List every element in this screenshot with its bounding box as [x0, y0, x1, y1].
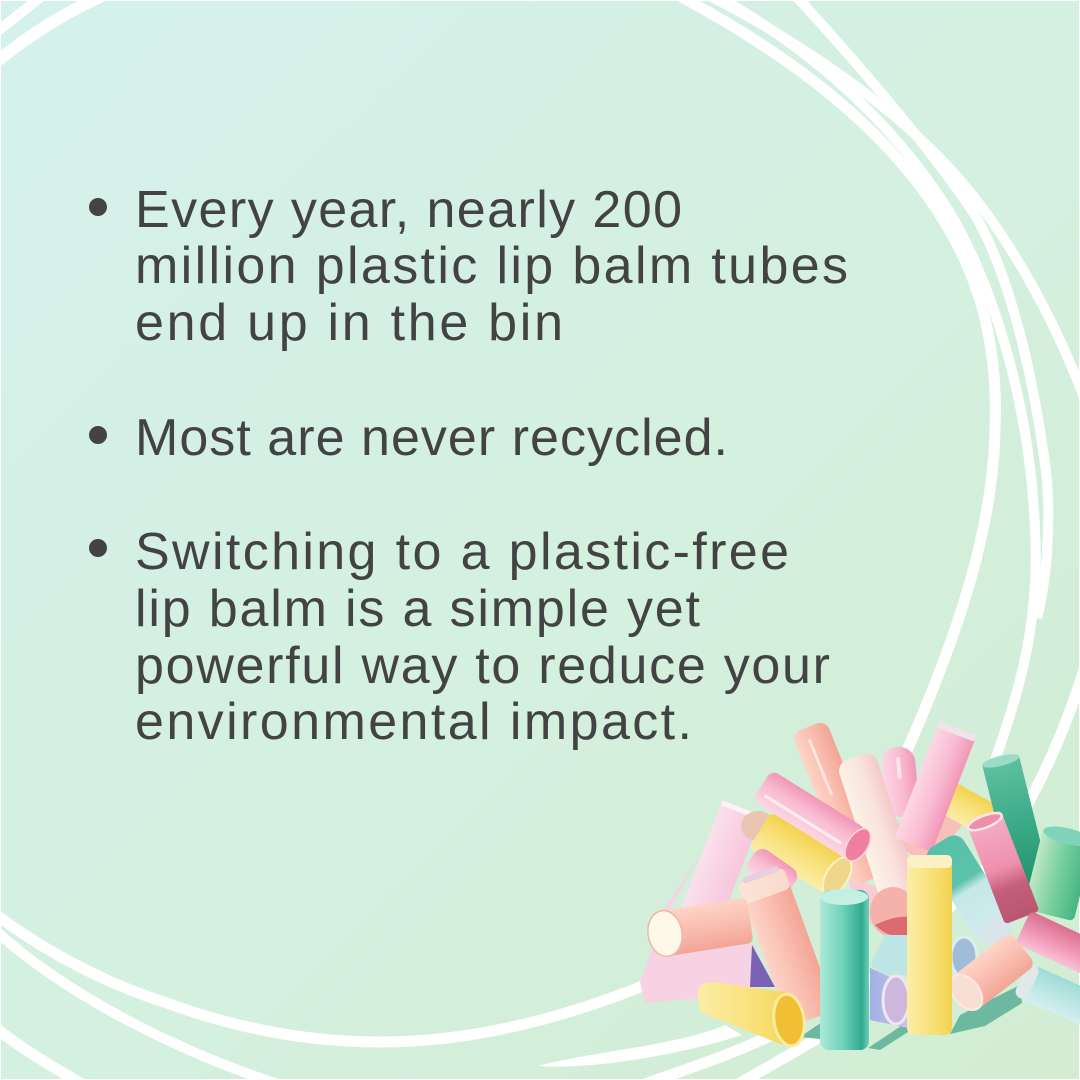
tube: peach right [943, 931, 1036, 1017]
bullet: switching to plastic-free: powerful way to reduce your [135, 637, 830, 695]
tube: bottom yellow [698, 982, 807, 1048]
tube: pale blue back [870, 935, 910, 975]
bullet: switching to plastic-free: environmental impact. [135, 693, 692, 751]
tube: central peach [736, 864, 835, 1027]
tube: teal upright [820, 889, 869, 1050]
tube: lime cup right [1023, 822, 1080, 921]
bullet: 200 million tubes: end up in the bin [135, 294, 563, 352]
bullet: never recycled: Most are never recycled. [135, 409, 728, 467]
bullet: 200 million tubes: Every year, nearly 200 [135, 181, 682, 239]
tube: blue back [951, 937, 977, 977]
tube: left pale pink [678, 800, 762, 932]
tube: cream long [836, 751, 920, 906]
tube: brownish back [741, 811, 775, 841]
wrapper: pale pink shape [640, 857, 755, 1003]
tube: middle yellow [749, 812, 857, 900]
shadow: purple gap [750, 945, 775, 987]
tube: small pink [743, 845, 801, 898]
illustration: pile of pastel lip balm tubes [640, 720, 1080, 1050]
tube: back yellow [939, 782, 1008, 841]
bullet: 200 million tubes: million plastic lip balm tubes [135, 237, 848, 295]
tube: upright pink [895, 721, 977, 852]
tube: teal to pale [922, 831, 1019, 952]
bullet: 200 million tubes [89, 181, 848, 352]
tube: left horizontal peach [645, 897, 754, 959]
tube: tall green [981, 751, 1051, 894]
bullet: switching to plastic-free: lip balm is a simple yet [135, 580, 701, 638]
tube: teal bottom right [1013, 962, 1080, 1027]
tube: bright pink with open end [752, 770, 876, 865]
tube: back peach [791, 720, 887, 887]
tube: yellow upright [907, 855, 952, 1035]
tube: lilac small [870, 968, 909, 1028]
tube: pink open top [966, 809, 1039, 924]
tube: pink bottom right [1015, 911, 1080, 975]
tube: small pink dome [880, 746, 920, 818]
tube: red dome [870, 887, 916, 938]
bullet: switching to plastic-free [89, 523, 830, 751]
bullet: switching to plastic-free: Switching to a plastic-free [135, 523, 789, 581]
